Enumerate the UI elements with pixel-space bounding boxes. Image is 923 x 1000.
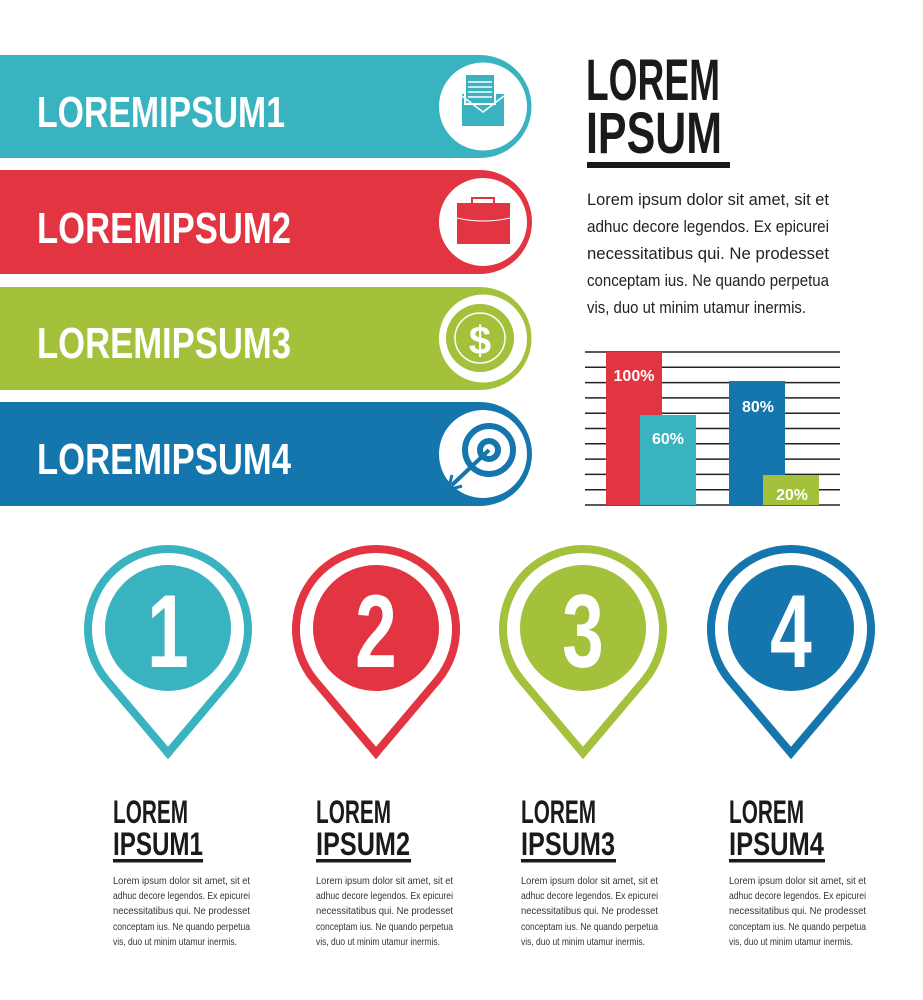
banner 2 bbox=[0, 170, 532, 274]
text block: item 4: IPSUM4 bbox=[729, 826, 824, 862]
text block: item 3: LOREM bbox=[521, 794, 596, 830]
text block: item 2: necessitatibus qui. Ne prodesset bbox=[316, 905, 453, 917]
text block: intro bbox=[587, 190, 829, 317]
text block: item 4: vis, duo ut minim utamur inermis. bbox=[729, 936, 853, 948]
text block: item 1: IPSUM1 bbox=[113, 826, 203, 862]
text block: item 3: IPSUM3 bbox=[521, 826, 615, 862]
text block: intro: vis, duo ut minim utamur inermis. bbox=[587, 298, 806, 317]
text block: item 4: Lorem ipsum dolor sit amet, sit et bbox=[729, 875, 866, 887]
text block: item 1: vis, duo ut minim utamur inermis. bbox=[113, 936, 237, 948]
text block: item 4: LOREM bbox=[729, 794, 804, 830]
bar chart: 80% bbox=[742, 399, 774, 416]
title: IPSUM bbox=[586, 101, 722, 166]
banner 1: LOREMIPSUM1 bbox=[37, 88, 285, 137]
pin 1 bbox=[88, 549, 248, 753]
text block: item 3: vis, duo ut minim utamur inermis. bbox=[521, 936, 645, 948]
text block: item 3 bbox=[521, 794, 658, 948]
title: LOREM bbox=[586, 48, 720, 113]
icon: dollar coin bbox=[446, 304, 514, 372]
text block: intro: conceptam ius. Ne quando perpetua bbox=[587, 271, 829, 290]
pin 1: 1 bbox=[147, 574, 189, 690]
banner 4: LOREMIPSUM4 bbox=[37, 435, 291, 484]
text block: item 2: vis, duo ut minim utamur inermis. bbox=[316, 936, 440, 948]
text block: intro: necessitatibus qui. Ne prodesset bbox=[587, 244, 829, 263]
text block: item 2: IPSUM2 bbox=[316, 826, 410, 862]
pin 3: 3 bbox=[562, 574, 604, 690]
text block: item 3: necessitatibus qui. Ne prodesset bbox=[521, 905, 658, 917]
text block: item 3: Lorem ipsum dolor sit amet, sit et bbox=[521, 875, 658, 887]
text block: item 2: Lorem ipsum dolor sit amet, sit et bbox=[316, 875, 453, 887]
banner 3 bbox=[0, 287, 532, 390]
bar chart: 20% bbox=[776, 487, 808, 504]
bar chart bbox=[585, 352, 840, 505]
text block: item 4: adhuc decore legendos. Ex epicurei bbox=[729, 890, 866, 902]
bar chart: 60% bbox=[652, 431, 684, 448]
text block: item 1 bbox=[113, 794, 250, 948]
pin 2 bbox=[296, 549, 456, 753]
text block: item 1: conceptam ius. Ne quando perpetua bbox=[113, 921, 250, 933]
pin 4 bbox=[711, 549, 871, 753]
icon: dollar coin: $ bbox=[469, 319, 491, 363]
text block: item 4: conceptam ius. Ne quando perpetua bbox=[729, 921, 866, 933]
pin 2: 2 bbox=[355, 574, 397, 690]
pin 3 bbox=[503, 549, 663, 753]
text block: item 2: adhuc decore legendos. Ex epicurei bbox=[316, 890, 453, 902]
banner 4 bbox=[0, 402, 532, 506]
pin 4: 4 bbox=[770, 574, 812, 690]
banner 2: LOREMIPSUM2 bbox=[37, 204, 291, 253]
text block: intro: Lorem ipsum dolor sit amet, sit et bbox=[587, 190, 829, 209]
text block: item 1: necessitatibus qui. Ne prodesset bbox=[113, 905, 250, 917]
banner 3: LOREMIPSUM3 bbox=[37, 319, 291, 368]
text block: item 1: adhuc decore legendos. Ex epicurei bbox=[113, 890, 250, 902]
text block: item 2 bbox=[316, 794, 453, 948]
text block: item 3: adhuc decore legendos. Ex epicurei bbox=[521, 890, 658, 902]
text block: item 2: LOREM bbox=[316, 794, 391, 830]
icon: target bbox=[448, 426, 513, 490]
text block: item 2: conceptam ius. Ne quando perpetua bbox=[316, 921, 453, 933]
banner 1 bbox=[0, 55, 532, 158]
text block: item 4 bbox=[729, 794, 866, 948]
bar chart: 100% bbox=[614, 368, 654, 385]
title bbox=[586, 48, 730, 168]
text block: item 1: LOREM bbox=[113, 794, 188, 830]
icon: envelope bbox=[462, 74, 504, 126]
text block: item 1: Lorem ipsum dolor sit amet, sit et bbox=[113, 875, 250, 887]
text block: intro: adhuc decore legendos. Ex epicurei bbox=[587, 217, 829, 236]
text block: item 4: necessitatibus qui. Ne prodesset bbox=[729, 905, 866, 917]
icon: briefcase bbox=[457, 198, 510, 244]
text block: item 3: conceptam ius. Ne quando perpetua bbox=[521, 921, 658, 933]
